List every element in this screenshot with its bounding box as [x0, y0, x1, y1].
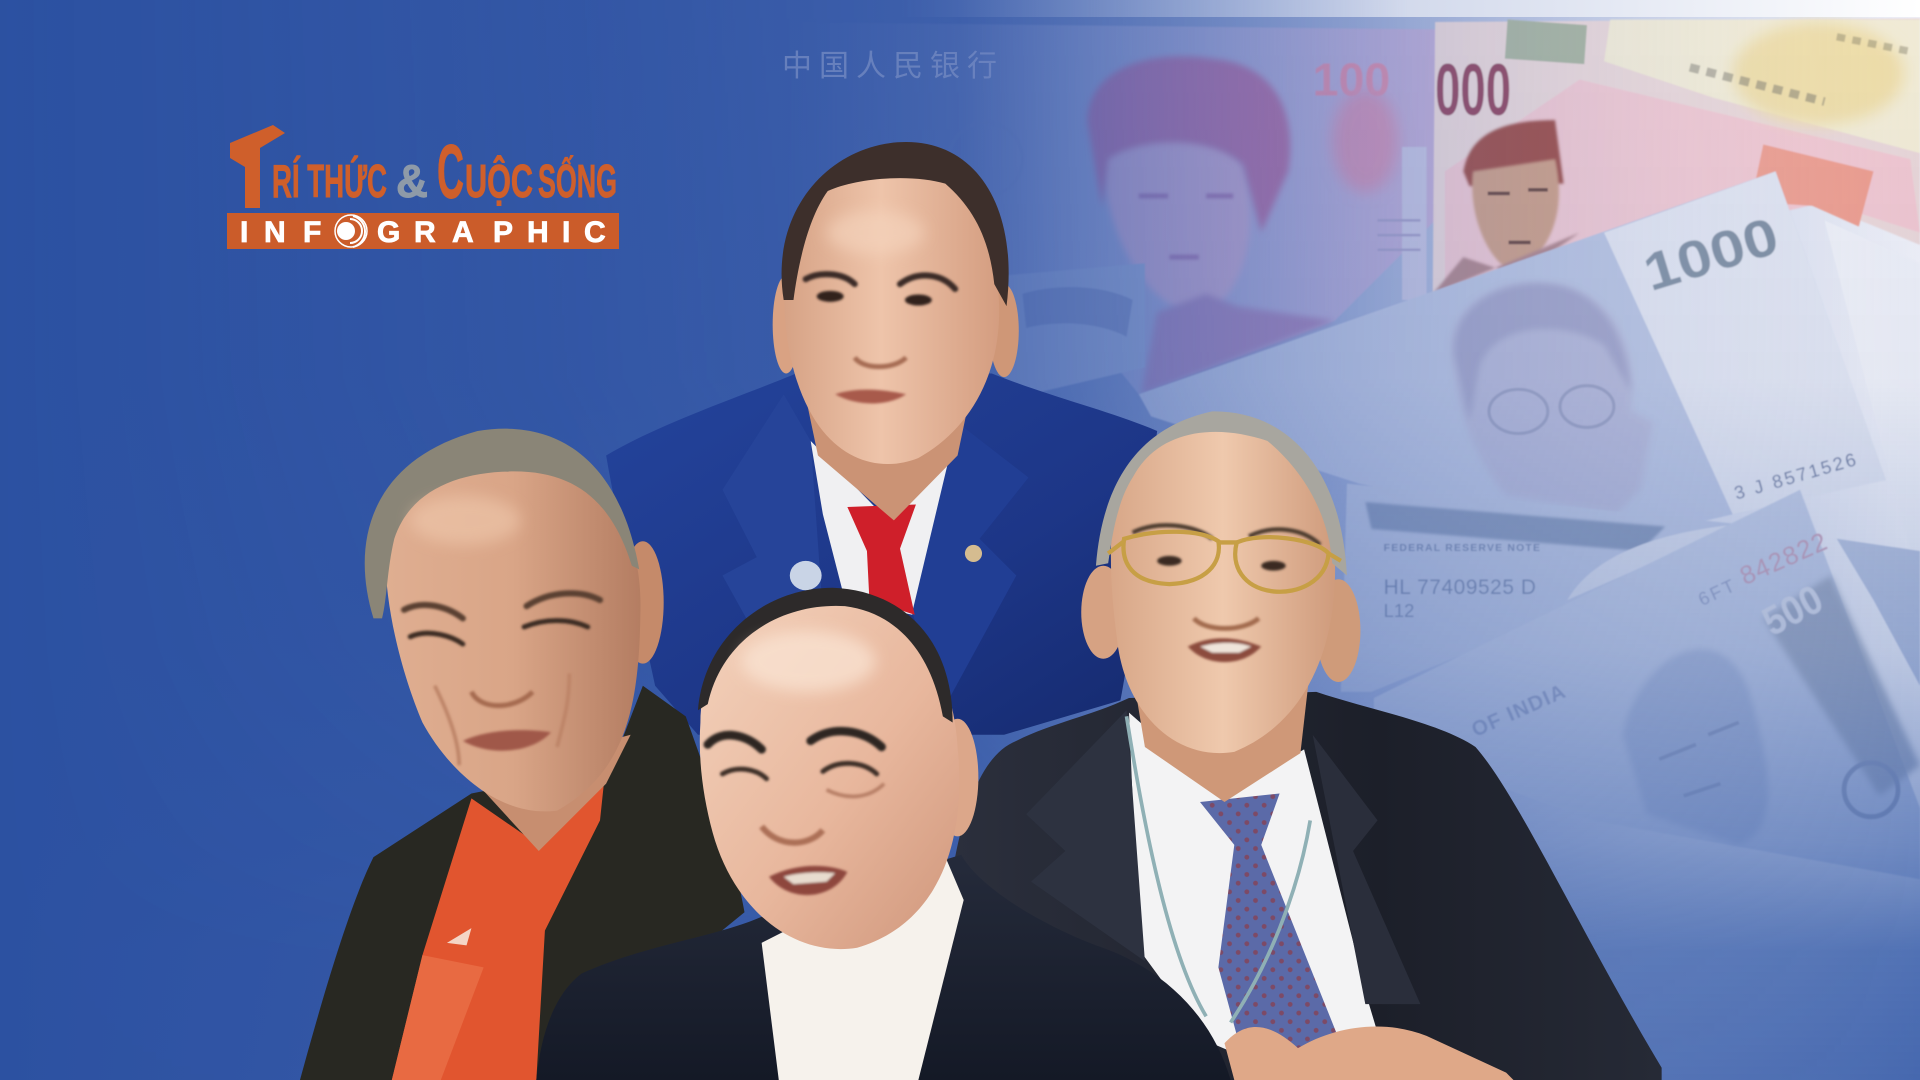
logo: Tri Thuc & Cuoc Song Infographic: GRAPHIC — [377, 216, 606, 249]
banknote: US dollar: L12 — [1384, 600, 1414, 621]
logo wordmark — [272, 130, 617, 215]
portrait: man with glasses (right) — [955, 411, 1662, 1080]
hands — [1224, 1026, 1513, 1080]
logo: Tri Thuc & Cuoc Song Infographic — [227, 125, 619, 249]
logo wordmark: C — [437, 130, 464, 215]
logo icon: stylised T mark — [230, 125, 285, 208]
banknote: US dollar — [1341, 484, 1739, 692]
banknote: Indian rupee 500 — [1374, 490, 1920, 879]
banknote: Chinese yuan 100: 100 — [1313, 54, 1390, 106]
glasses — [1108, 532, 1341, 592]
logo wordmark: & — [396, 155, 428, 207]
banknote: small dollar piece behind top person — [1004, 263, 1145, 392]
top light strip — [900, 0, 1920, 17]
banknote: US dollar: HL 77409525 D — [1384, 576, 1537, 599]
banknote: Chinese yuan 100 — [784, 22, 1435, 394]
banknote: Indian rupee 500: 500 — [1754, 575, 1830, 645]
banknote: Indonesian rupiah 1000 — [1433, 18, 1920, 294]
banknote: Thai baht 1000: 3 J 8571526 — [1732, 448, 1860, 503]
logo: Tri Thuc & Cuoc Song Infographic: INF — [240, 216, 321, 249]
logo wordmark: SỐNG — [538, 155, 617, 207]
logo wordmark: RÍ THỨC — [272, 155, 387, 207]
banknote: Thai baht 1000 — [1139, 171, 1920, 588]
logo icon: concentric O — [335, 215, 367, 247]
portrait: man in blue suit (top) — [606, 142, 1157, 735]
portrait: bald man in dark suit (front) — [536, 588, 1231, 1080]
logo banner — [227, 213, 619, 249]
banknote: Indian rupee 500: OF INDIA — [1468, 680, 1570, 742]
portrait: older man in orange shirt (left) — [300, 429, 744, 1080]
banknote text: People's Bank of China: 中国人民银行 — [782, 50, 1004, 83]
banknote: Indian rupee 500: 842822 — [1736, 527, 1832, 591]
banknote: Indian rupee 500: 6FT — [1695, 574, 1740, 610]
banknote: Thai baht security panel — [1604, 20, 1920, 153]
banknotes collage — [784, 18, 1920, 879]
banknote: US dollar: FEDERAL RESERVE NOTE — [1384, 543, 1541, 554]
portraits group — [300, 142, 1662, 1080]
banknote: Indonesian rupiah 1000: 000 — [1435, 48, 1511, 131]
banknote: Thai baht 1000: 1000 — [1637, 206, 1785, 303]
logo wordmark: UỘC — [465, 155, 533, 207]
